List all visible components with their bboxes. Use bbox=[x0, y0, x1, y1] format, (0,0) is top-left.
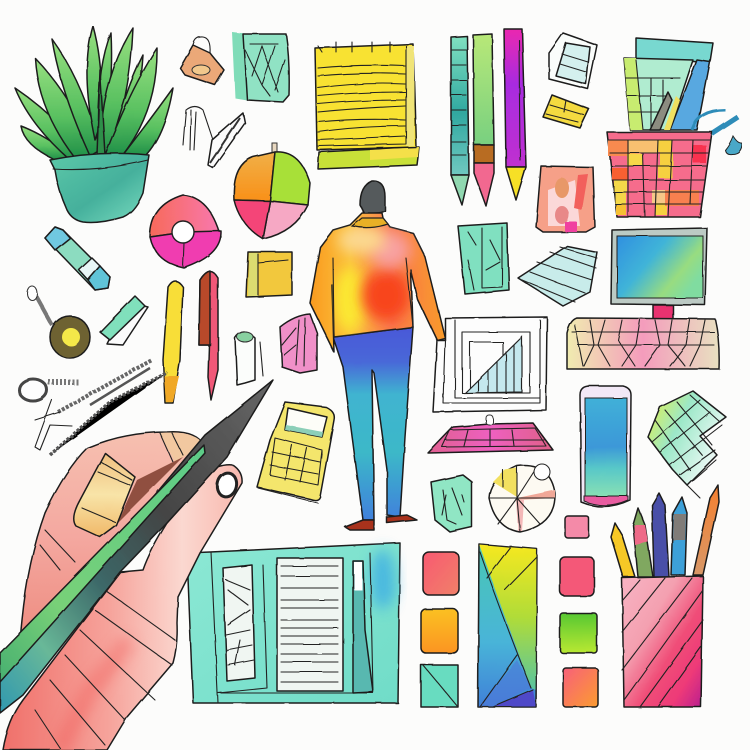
icon: white card bbox=[549, 33, 597, 89]
hair bbox=[360, 181, 385, 213]
icon: purple pencil bbox=[504, 29, 526, 200]
icon: grid sheet bbox=[648, 391, 726, 498]
swatch: green square bbox=[560, 613, 597, 653]
icon: tube bbox=[235, 332, 263, 385]
icon: pink pouch bbox=[280, 314, 317, 373]
icon: clip sketches bbox=[183, 106, 245, 168]
icon: yellow box bbox=[246, 252, 292, 297]
icon: teal leaf card bbox=[458, 223, 509, 294]
panel: tall colour strip bbox=[478, 544, 537, 707]
icon: scissors bbox=[19, 360, 167, 455]
sweater bbox=[310, 213, 445, 352]
swatch: orange square bbox=[421, 609, 458, 653]
upper finger bbox=[20, 432, 204, 640]
icon: red pencil bbox=[199, 271, 218, 400]
icon: tan pouch bbox=[180, 37, 224, 85]
pen nib and lower band bbox=[0, 380, 273, 713]
icon: papers and basket bbox=[607, 38, 742, 217]
icon: open book bbox=[187, 543, 400, 703]
icon: teal pencil bbox=[451, 36, 469, 205]
icon: colour pie bbox=[234, 143, 310, 239]
shoes bbox=[345, 515, 417, 530]
icon: yellow notepad bbox=[315, 42, 419, 169]
icon: pen cup with pens bbox=[611, 485, 719, 707]
icon: keyboard bbox=[567, 318, 719, 369]
icon: potted plant bbox=[15, 26, 173, 222]
icon: small eraser bbox=[100, 296, 148, 345]
icon: colour wheel bbox=[489, 464, 555, 532]
icon: yellow pencil bbox=[163, 281, 183, 403]
swatch: pink square bbox=[560, 557, 594, 596]
pen green body bbox=[0, 445, 205, 682]
icon: magnifier bbox=[27, 286, 90, 358]
icon: smartphone bbox=[580, 386, 631, 507]
icon: pink donut bbox=[150, 195, 221, 268]
icon: calculator bbox=[257, 402, 334, 503]
swatch: red square bbox=[423, 552, 459, 595]
icon: pink orange card bbox=[536, 166, 595, 232]
swatch: teal square bbox=[421, 665, 458, 707]
illustration: hand holding pen bbox=[0, 380, 273, 750]
icon: small yellow card bbox=[543, 95, 589, 128]
lower finger and palm bbox=[3, 465, 242, 750]
swatch: small pink square bbox=[565, 516, 589, 538]
icon: teal tag bbox=[431, 475, 472, 532]
icon: framed chart bbox=[433, 317, 547, 412]
icon: blue marker bbox=[45, 227, 110, 290]
icon: green notebook bbox=[232, 32, 289, 102]
figure: standing person bbox=[310, 181, 445, 530]
icon: pink pad bbox=[428, 415, 553, 453]
icon: green pencil with red tip bbox=[473, 34, 494, 206]
icon: striped tag bbox=[518, 246, 597, 306]
thumbnail bandage bbox=[74, 453, 135, 537]
swatch: orange red square bbox=[563, 668, 598, 707]
icon: computer monitor bbox=[611, 228, 707, 319]
jeans bbox=[333, 327, 413, 520]
